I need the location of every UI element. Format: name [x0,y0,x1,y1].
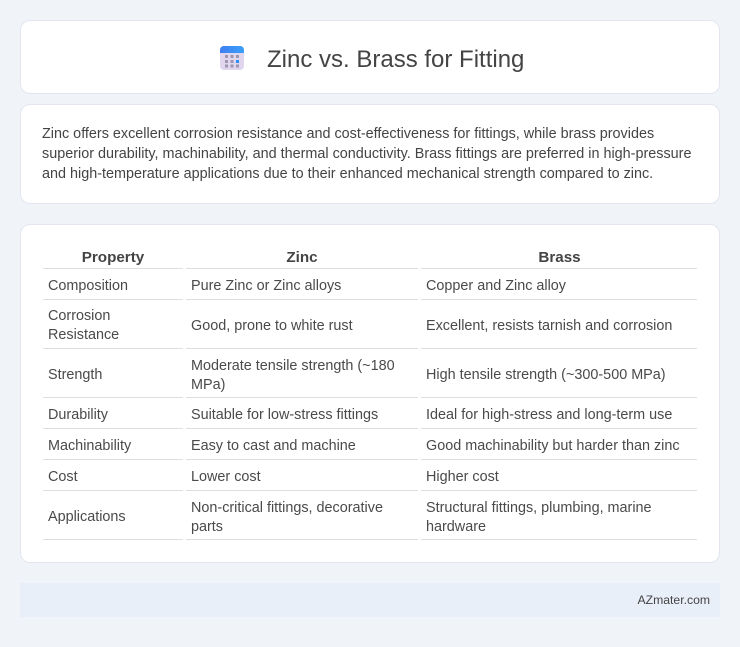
row: cost: Cost [48,469,78,485]
icon: calendar [220,46,244,70]
row: cost: Higher cost [426,469,499,485]
row: strength: Moderate tensile strength (~180 [191,358,395,374]
table header: Zinc [286,249,318,266]
table header: Property [82,249,144,266]
row: applications: Non-critical fittings, decorative [191,500,383,516]
row: composition: Copper and Zinc alloy [426,278,566,294]
row: applications: hardware [426,519,486,535]
row: cost [48,469,499,485]
row: machinability [48,438,680,454]
panel: summary [20,104,720,204]
row: durability [48,407,672,423]
panel: comparison table [20,224,720,563]
row: corrosion resistance: Corrosion [48,308,110,324]
row: strength: High tensile strength (~300-500 MPa) [426,367,666,383]
table header [82,249,581,266]
summary text: and high-temperature applications due to their enhanced mechanical strength compared to zinc. [42,166,653,182]
row: corrosion resistance: Excellent, resists tarnish and corrosion [426,318,672,334]
summary text: superior durability, machinability, and thermal conductivity. Brass fittings are preferred in high-pressure [42,146,691,162]
row: composition [48,278,566,294]
row: strength: Strength [48,367,102,383]
table header: Brass [538,249,581,266]
row: applications: Applications [48,509,126,525]
row: applications [48,500,652,535]
row: machinability: Easy to cast and machine [191,438,356,454]
row: corrosion resistance: Resistance [48,327,119,343]
row: durability: Suitable for low-stress fittings [191,407,378,423]
footer credit: AZmater.com [638,593,710,607]
row: corrosion resistance [48,308,672,343]
footer bar [20,583,720,617]
row: machinability: Machinability [48,438,131,454]
row: strength [48,358,666,393]
row: applications: Structural fittings, plumbing, marine [426,500,652,516]
row: durability: Ideal for high-stress and long-term use [426,407,672,423]
row: composition: Pure Zinc or Zinc alloys [191,278,341,294]
row: cost: Lower cost [191,469,261,485]
row: composition: Composition [48,278,128,294]
panel: title header [20,20,720,94]
row: machinability: Good machinability but harder than zinc [426,438,680,454]
row: strength: MPa) [191,377,225,393]
summary text: Zinc offers excellent corrosion resistance and cost-effectiveness for fittings, while brass provides [42,126,654,142]
title: Zinc vs. Brass for Fitting [267,46,524,73]
row: durability: Durability [48,407,108,423]
row: applications: parts [191,519,223,535]
summary text [42,126,691,182]
row: corrosion resistance: Good, prone to white rust [191,318,353,334]
